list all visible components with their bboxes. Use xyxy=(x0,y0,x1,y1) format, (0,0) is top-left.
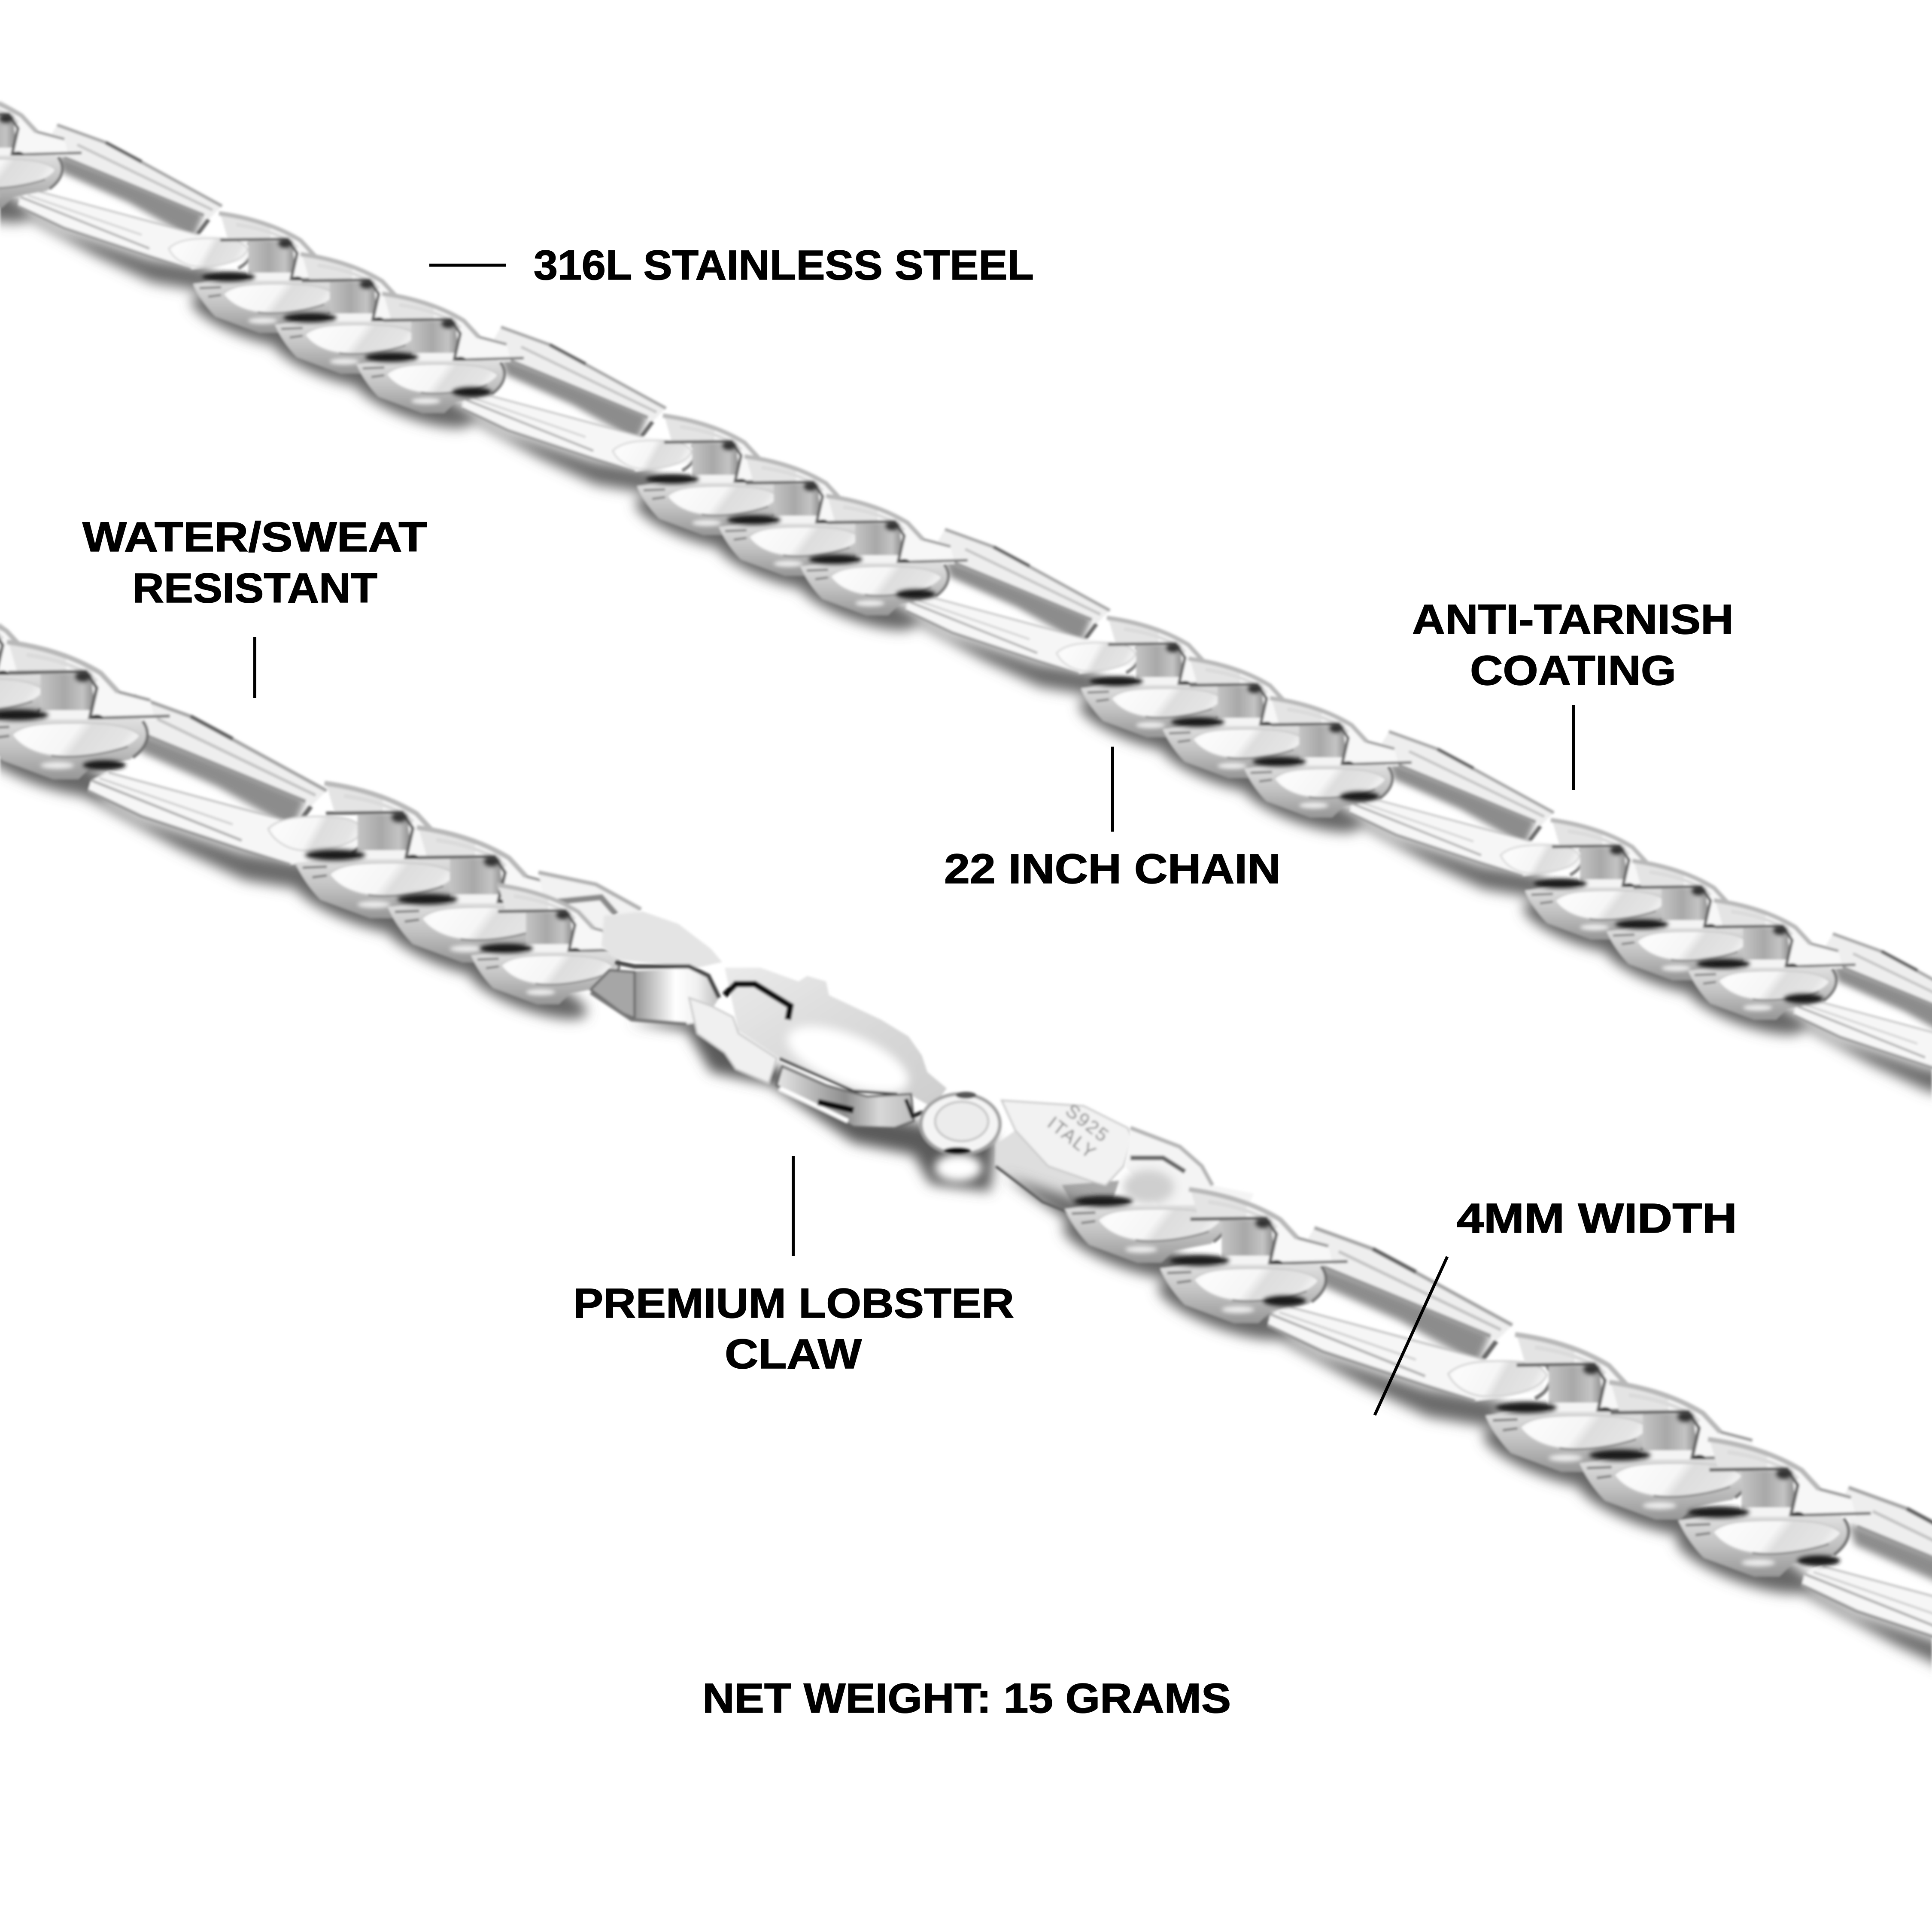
callout: premium lobster claw xyxy=(573,1156,1014,1377)
clasp lower jaw xyxy=(777,1066,923,1128)
lower right soft shadow xyxy=(1005,1176,1932,1687)
callout: water/sweat resistant: WATER/SWEAT xyxy=(82,513,427,560)
spring ring highlight xyxy=(935,1154,982,1182)
callout: water/sweat resistant: RESISTANT xyxy=(132,565,377,611)
clasp shadow xyxy=(629,1018,996,1191)
callout: 4mm width xyxy=(1375,1195,1737,1415)
lower chain right section xyxy=(1005,1128,1932,1687)
lower right long links xyxy=(1267,1228,1932,1661)
stamped tag xyxy=(1002,1100,1133,1185)
callout: premium lobster claw: PREMIUM LOBSTER xyxy=(573,1280,1014,1327)
net weight label: NET WEIGHT: 15 GRAMS xyxy=(702,1675,1231,1722)
clasp eye xyxy=(601,911,722,968)
upper chain long links xyxy=(18,125,1932,1078)
tag stamp: S925: S925 xyxy=(1062,1100,1113,1147)
inner link xyxy=(689,998,777,1083)
jump ring xyxy=(921,1092,1000,1154)
upper figaro chain xyxy=(0,88,1932,1100)
callout: 4mm width: 4MM WIDTH xyxy=(1457,1195,1737,1242)
upper chain soft shadow xyxy=(0,158,1932,1100)
callout: anti-tarnish coating: ANTI-TARNISH xyxy=(1412,596,1734,643)
lower chain left section xyxy=(0,601,641,1030)
lower right short links xyxy=(1065,1128,1871,1577)
connector block xyxy=(591,962,719,1024)
lower left short links xyxy=(0,601,641,1004)
tag stamp: ITALY: ITALY xyxy=(1043,1112,1101,1163)
callout: anti-tarnish coating: COATING xyxy=(1470,647,1676,694)
callout: water/sweat resistant xyxy=(82,513,427,698)
callout: 22 inch chain xyxy=(944,747,1281,892)
callout: 22 inch chain: 22 INCH CHAIN xyxy=(944,845,1281,892)
lobster clasp xyxy=(591,911,1133,1219)
lower tag wing xyxy=(996,1130,1119,1219)
callout: 316L stainless steel: 316L STAINLESS STEEL xyxy=(534,242,1034,289)
lower left long link xyxy=(88,696,357,865)
clasp body xyxy=(725,968,947,1108)
callout: anti-tarnish coating xyxy=(1412,596,1734,790)
upper chain short curb links xyxy=(0,88,1856,1020)
lower left soft shadow xyxy=(0,678,592,1030)
callout: premium lobster claw: CLAW xyxy=(725,1331,862,1377)
